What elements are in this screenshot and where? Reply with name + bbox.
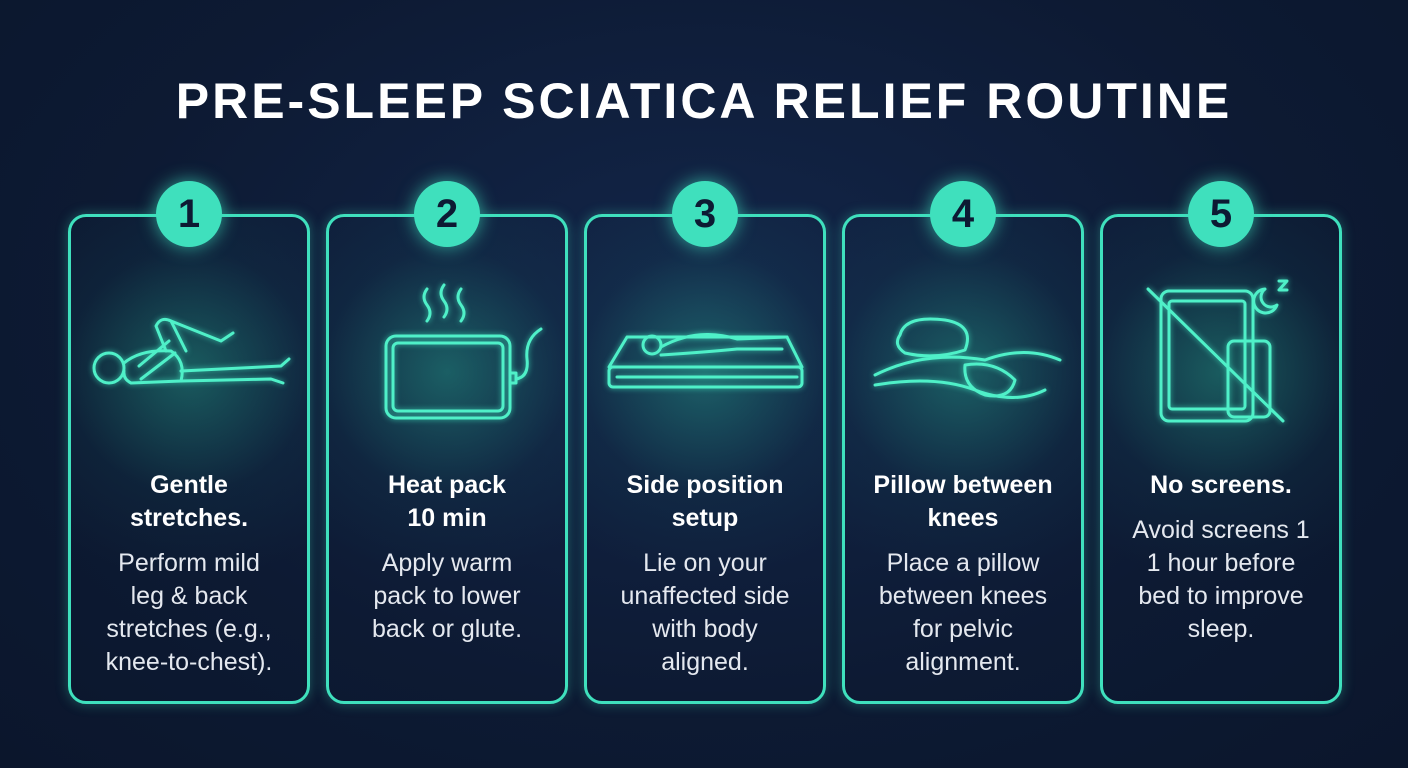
heading: Side position	[627, 471, 783, 499]
body text: leg & back	[131, 582, 247, 610]
body text: Apply warm	[382, 549, 512, 577]
body text: 1 hour before	[1147, 549, 1295, 577]
badge 2	[414, 181, 480, 247]
body text	[372, 549, 522, 643]
badge 4: 4	[952, 192, 974, 236]
heading: Pillow between	[873, 471, 1053, 499]
heading	[873, 471, 1053, 532]
panel: step 1	[68, 214, 310, 704]
panel: step 2	[326, 214, 568, 704]
panel: step 3	[584, 214, 826, 704]
heading: setup	[672, 504, 738, 532]
icon: no screens	[1144, 275, 1292, 426]
body text: bed to improve	[1138, 582, 1304, 610]
body text: Lie on your	[643, 549, 767, 577]
title: PRE-SLEEP SCIATICA RELIEF ROUTINE	[176, 73, 1232, 129]
badge 3: 3	[694, 192, 716, 236]
body text	[879, 549, 1047, 676]
body text	[1132, 516, 1310, 643]
body text: sleep.	[1188, 615, 1254, 643]
body text: Place a pillow	[887, 549, 1039, 577]
body text: for pelvic	[913, 615, 1013, 643]
body text: Perform mild	[118, 549, 260, 577]
body text: Avoid screens 1	[1132, 516, 1310, 544]
badge 5	[1188, 181, 1254, 247]
badge 4	[930, 181, 996, 247]
body text: stretches (e.g.,	[106, 615, 272, 643]
badge 1	[156, 181, 222, 247]
icon: heat pack	[380, 281, 545, 424]
heading: Gentle	[150, 471, 228, 499]
body text: between knees	[879, 582, 1047, 610]
heading: stretches.	[130, 504, 248, 532]
badge 1: 1	[178, 192, 200, 236]
body text	[620, 549, 790, 676]
body text: knee-to-chest).	[106, 648, 272, 676]
body text: pack to lower	[373, 582, 521, 610]
icon: pillow between knees	[871, 314, 1064, 403]
icon: person lying on mattress	[604, 329, 808, 392]
heading: Heat pack	[388, 471, 506, 499]
body text: with body	[652, 615, 758, 643]
heading	[130, 471, 248, 532]
body text: aligned.	[661, 648, 749, 676]
heading: No screens.	[1150, 471, 1292, 499]
body text	[106, 549, 272, 676]
badge 3	[672, 181, 738, 247]
heading: knees	[928, 504, 998, 532]
panel: step 5	[1100, 214, 1342, 704]
body text: alignment.	[905, 648, 1021, 676]
body text: back or glute.	[372, 615, 522, 643]
badge 5: 5	[1210, 192, 1232, 236]
heading	[627, 471, 783, 532]
heading	[388, 471, 506, 532]
heading: 10 min	[407, 504, 487, 532]
badge 2: 2	[436, 192, 458, 236]
panel: step 4	[842, 214, 1084, 704]
icon: stretching person	[88, 314, 293, 388]
body text: unaffected side	[620, 582, 790, 610]
